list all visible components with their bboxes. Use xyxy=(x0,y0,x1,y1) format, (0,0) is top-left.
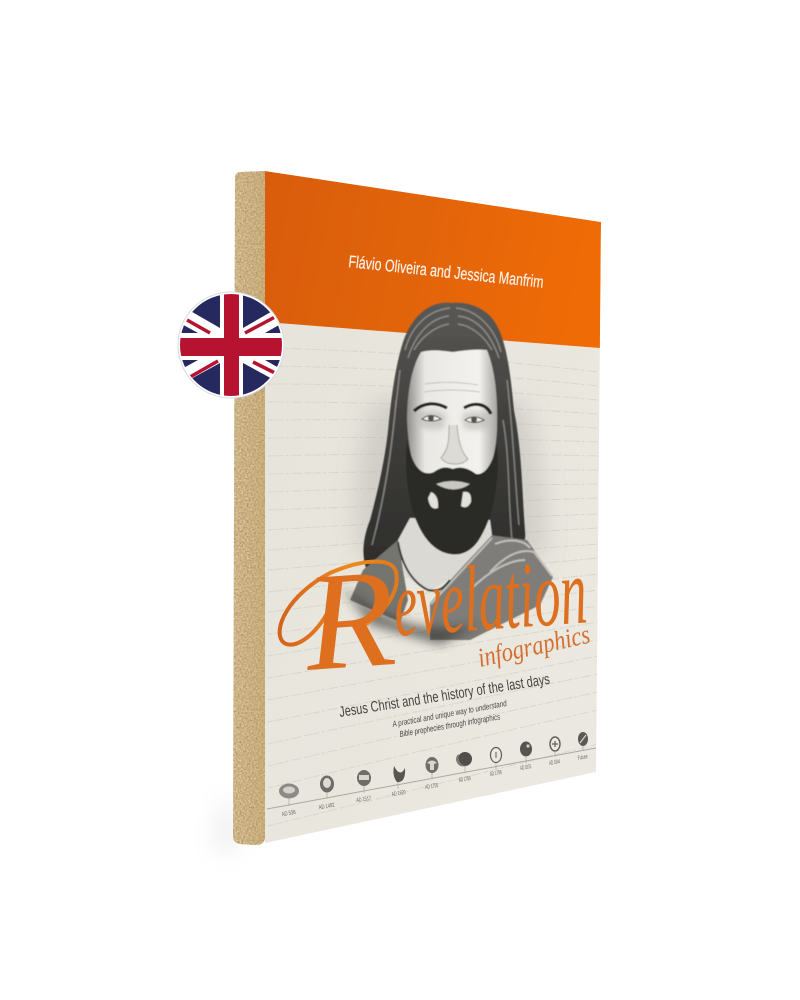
icon: AD 1492 xyxy=(318,776,336,811)
pencil shading halo xyxy=(355,400,546,560)
icon: AD 1798 xyxy=(489,748,503,778)
beard xyxy=(406,440,498,554)
icon: AD 1517: AD 1517 xyxy=(356,796,372,804)
icon: AD 1517 xyxy=(356,770,372,804)
icon: AD 1798: AD 1798 xyxy=(489,770,503,778)
robe folds xyxy=(431,538,552,604)
title swash xyxy=(280,562,397,645)
nose xyxy=(441,425,468,464)
book spine xyxy=(233,171,265,845)
subtitle: infographics: infographics xyxy=(475,619,593,673)
tagline: Jesus Christ and the history of the last days xyxy=(338,671,551,721)
lower shadow under robe xyxy=(340,585,480,645)
timeline axis xyxy=(267,748,596,809)
forehead lines xyxy=(424,382,480,392)
eye socket shading xyxy=(418,410,490,430)
icon: AD 1755 xyxy=(425,757,439,791)
hair highlights xyxy=(372,308,519,545)
icon: AD 1492: AD 1492 xyxy=(318,803,336,811)
hair xyxy=(363,303,525,568)
portrait illustration xyxy=(340,303,553,645)
icon: AD 538: AD 538 xyxy=(281,810,297,818)
icon: AD 1620 xyxy=(391,766,407,798)
icon: AD 1844 xyxy=(549,737,561,767)
robe left xyxy=(350,540,408,622)
icon: Future: Future xyxy=(577,754,589,762)
icon: AD 538 xyxy=(279,784,299,818)
cover paper background xyxy=(260,165,605,855)
icon: AD 1780: AD 1780 xyxy=(458,776,472,784)
icon: AD 1755: AD 1755 xyxy=(425,783,439,791)
book cover xyxy=(260,165,605,855)
beard gaps xyxy=(428,492,471,509)
eyes xyxy=(422,415,484,422)
book shadow xyxy=(215,800,238,850)
icon: AD 1844: AD 1844 xyxy=(549,759,561,767)
title: Revelation: R xyxy=(298,540,400,701)
icon: AD 1780 xyxy=(456,752,472,784)
handwriting texture xyxy=(268,348,598,826)
book product illustration xyxy=(178,171,601,845)
icon: UK flag badge xyxy=(176,288,286,402)
icon: AD 1620: AD 1620 xyxy=(391,790,407,798)
icon: AD 1833 xyxy=(520,742,532,772)
description xyxy=(391,698,508,739)
title: Revelation: evelation xyxy=(390,540,590,657)
description line 2: Bible prophecies through infographics xyxy=(399,711,501,739)
icon: Future xyxy=(577,732,589,762)
icon: AD 1833: AD 1833 xyxy=(520,764,532,772)
author names: Flávio Oliveira and Jessica Manfrim xyxy=(348,252,544,292)
title: Revelation xyxy=(280,527,592,701)
robe right xyxy=(430,535,553,640)
tunic collar line xyxy=(398,542,450,591)
timeline xyxy=(267,732,596,818)
orange top band xyxy=(265,171,601,348)
face xyxy=(407,350,497,478)
lips xyxy=(436,481,470,490)
neck and tunic xyxy=(398,518,492,592)
description line 1: A practical and unique way to understand xyxy=(391,698,508,729)
eyebrows xyxy=(414,404,491,414)
